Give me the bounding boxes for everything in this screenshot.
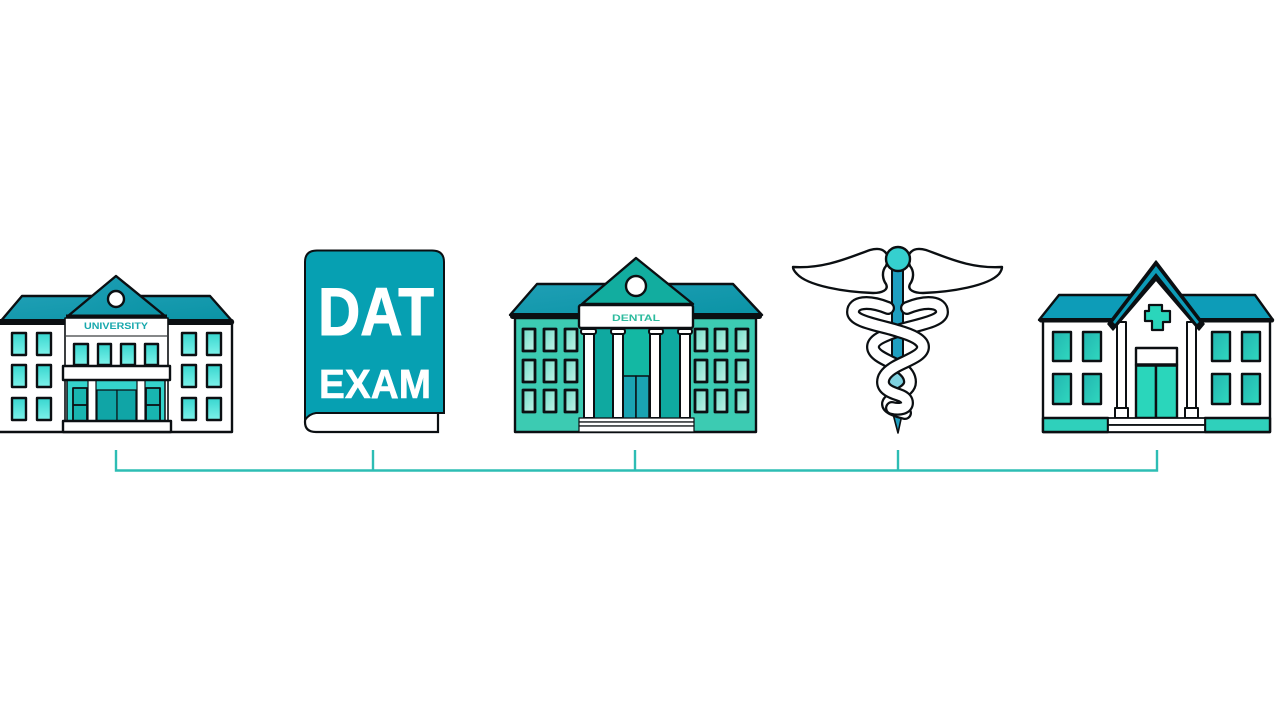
right windows (695, 329, 748, 412)
serpent right, outline (873, 303, 942, 413)
sign text: DENTAL (612, 313, 661, 323)
roof (0, 296, 233, 322)
foundation right (1205, 418, 1270, 432)
transom (1136, 348, 1177, 365)
cover title: DAT: DAT (318, 274, 434, 350)
icon: DAT exam book (305, 250, 444, 432)
medical cross (1145, 305, 1170, 330)
entablature (579, 305, 693, 328)
serpent right, body (873, 303, 942, 413)
door (623, 376, 649, 419)
left windows (12, 333, 51, 420)
staff (892, 270, 903, 370)
central upper windows (74, 344, 158, 365)
staff ball (886, 247, 910, 271)
centre gable wall (1117, 272, 1197, 418)
entrance columns (88, 380, 145, 422)
building walls (515, 318, 756, 432)
central block (65, 318, 168, 422)
steps (579, 418, 694, 432)
pediment (68, 276, 165, 316)
staff tip (892, 410, 903, 433)
book cover (305, 250, 444, 420)
entrance area (67, 380, 165, 422)
icon: caduceus (793, 247, 1002, 433)
steps (1108, 418, 1205, 432)
book pages (305, 412, 438, 432)
columns (581, 329, 692, 418)
staff lower bulb (888, 371, 906, 389)
portico background (585, 328, 690, 420)
roof (510, 284, 762, 315)
foundation left (1043, 418, 1108, 432)
cover title: EXAM: EXAM (319, 361, 431, 407)
eave (0, 319, 234, 325)
left windows (1053, 332, 1101, 404)
pediment window (108, 291, 124, 307)
entrance door (97, 390, 136, 422)
cross band (63, 366, 170, 380)
icon: university building (0, 276, 234, 432)
entrance base (63, 421, 171, 432)
serpent left, body (853, 303, 923, 409)
icon: dental school building (510, 258, 762, 432)
entrance side windows (73, 388, 160, 421)
sign text: UNIVERSITY (84, 321, 148, 331)
building walls (0, 322, 232, 432)
serpent left, outline (853, 303, 923, 409)
left windows (523, 329, 577, 412)
sign band line (66, 314, 167, 318)
pediment (582, 258, 693, 304)
portico centre panel (623, 328, 650, 376)
eave (510, 313, 762, 319)
roof (1039, 295, 1273, 320)
left wing (793, 249, 888, 293)
gable roof outer (1108, 261, 1204, 330)
gable roof inner colour (1113, 266, 1199, 324)
doors (1136, 365, 1177, 418)
timeline connector (116, 450, 1157, 470)
pediment window (626, 276, 646, 296)
eave (1039, 318, 1274, 322)
right wing (908, 249, 1002, 293)
columns (1115, 322, 1198, 418)
sign underline (66, 335, 167, 337)
right windows (1212, 332, 1260, 404)
icon: hospital building (1039, 261, 1274, 432)
building walls (1043, 320, 1270, 432)
right windows (182, 333, 221, 420)
